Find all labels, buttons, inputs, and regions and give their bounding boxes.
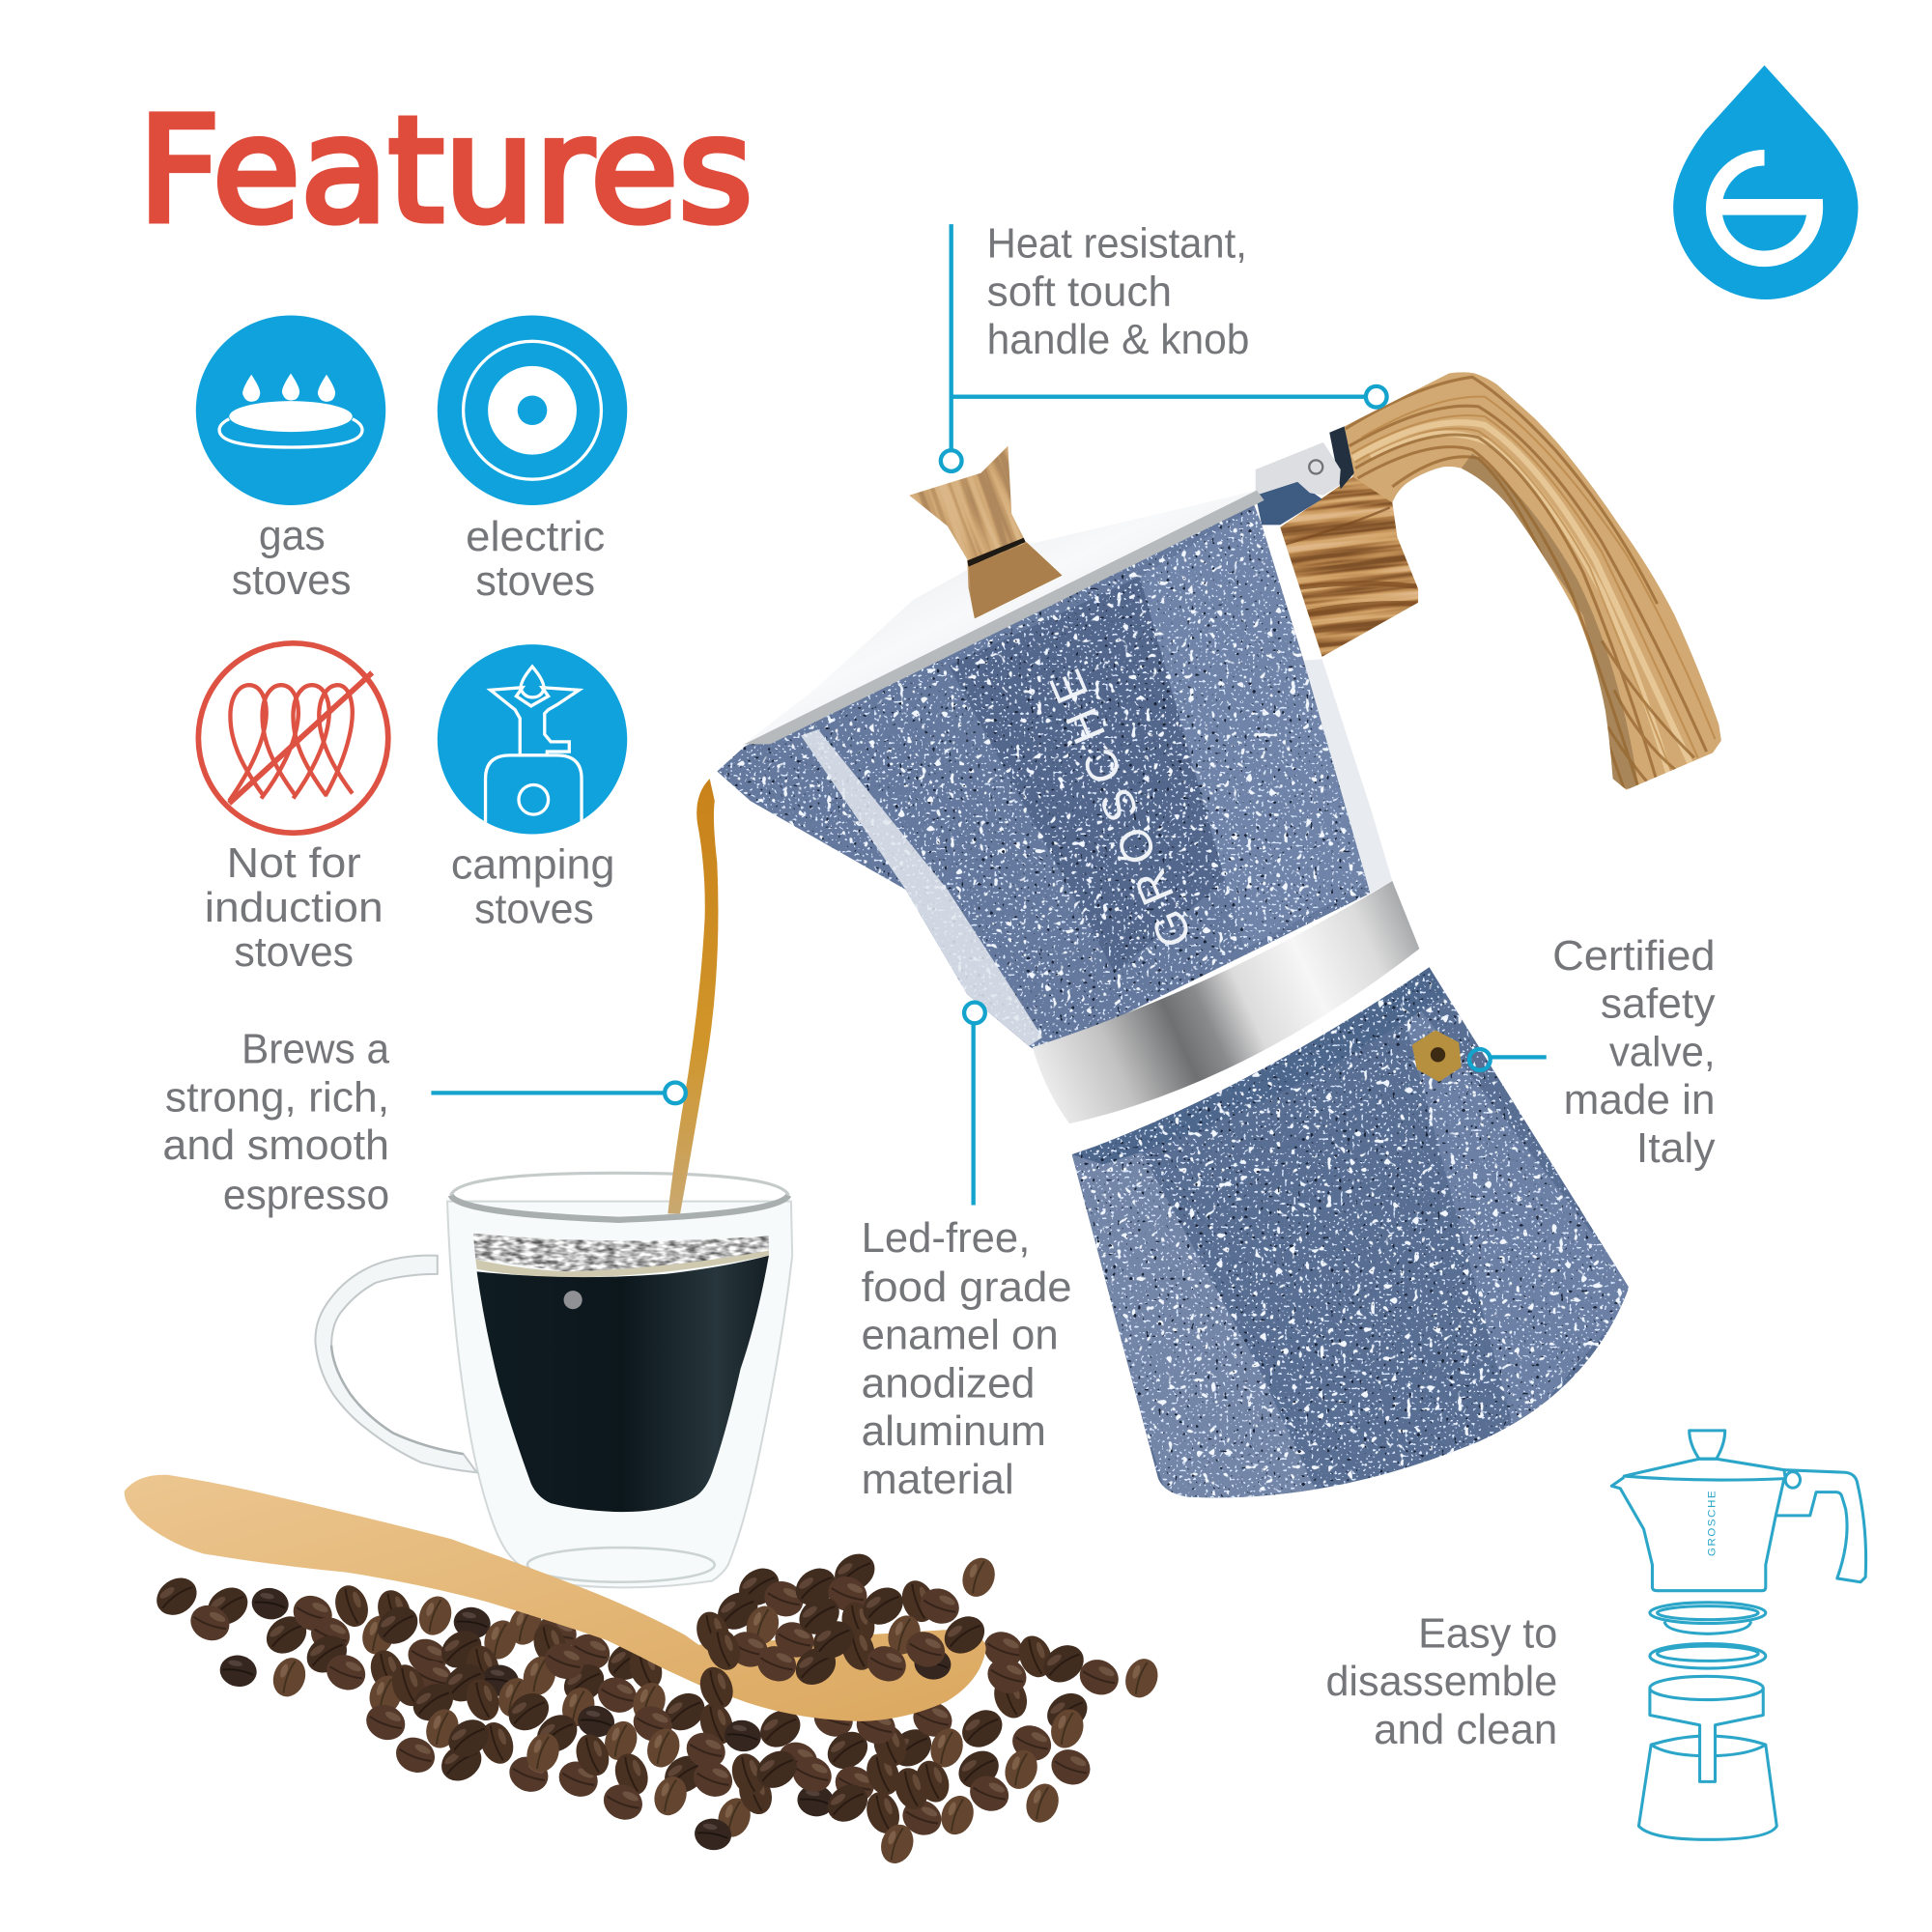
pot handle bbox=[1280, 372, 1721, 790]
label: not for induction stoves: stoves bbox=[234, 929, 354, 976]
moka pot bbox=[702, 357, 1737, 1516]
callout: safety valve bbox=[1469, 1049, 1547, 1070]
text: enamel material: food grade bbox=[862, 1264, 1072, 1311]
coffee stream bbox=[668, 779, 718, 1213]
text: espresso callout bbox=[162, 1027, 390, 1218]
callout: espresso stream bbox=[431, 1083, 686, 1103]
icon: electric stoves bbox=[438, 316, 627, 505]
text: easy to clean: and clean bbox=[1374, 1707, 1557, 1753]
text: certified safety valve: Certified bbox=[1552, 933, 1716, 980]
label: not for induction stoves bbox=[205, 840, 384, 976]
text: espresso callout: strong, rich, bbox=[165, 1075, 389, 1122]
pale body reflection bbox=[1303, 659, 1392, 894]
coffee beans heaped on the spoon bbox=[691, 1561, 992, 1713]
label: gas stoves: stoves bbox=[232, 557, 352, 604]
gasket bbox=[1650, 1644, 1766, 1668]
bottom chamber bbox=[1638, 1736, 1776, 1839]
lid rim bbox=[744, 491, 1264, 744]
text: heat resistant: handle & knob bbox=[987, 317, 1249, 363]
text: certified safety valve: made in bbox=[1564, 1077, 1716, 1123]
filter plate bbox=[1650, 1603, 1766, 1634]
text: easy to clean bbox=[1325, 1610, 1557, 1753]
icon: gas stoves bbox=[196, 316, 385, 505]
pot upper body bbox=[717, 505, 1370, 1049]
text: easy to clean: disassemble bbox=[1325, 1659, 1557, 1705]
coffee beans under the spoon bbox=[150, 1547, 1163, 1868]
label: electric stoves: stoves bbox=[475, 558, 595, 605]
label: not for induction stoves: induction bbox=[205, 885, 384, 931]
text: espresso callout: espresso bbox=[223, 1172, 389, 1218]
label: camping stoves: camping bbox=[451, 841, 614, 888]
text: espresso callout: Brews a bbox=[242, 1027, 390, 1073]
icon: camping stoves bbox=[438, 644, 627, 844]
text: heat resistant: Heat resistant, bbox=[987, 221, 1247, 268]
text: easy to clean: Easy to bbox=[1418, 1610, 1557, 1657]
label: camping stoves: stoves bbox=[474, 886, 594, 932]
callout: enamel body bbox=[964, 1003, 985, 1205]
pot lid bbox=[744, 487, 1269, 752]
brand name on pot: GROSCHE bbox=[1039, 663, 1203, 954]
glass mug bbox=[315, 1173, 792, 1587]
title: Features bbox=[138, 86, 753, 255]
label: camping stoves bbox=[451, 841, 614, 932]
icon: not for induction bbox=[198, 643, 388, 833]
label: gas stoves: gas bbox=[259, 513, 326, 559]
text: enamel material: material bbox=[862, 1457, 1014, 1503]
label: electric stoves: electric bbox=[466, 514, 605, 560]
label: electric stoves bbox=[466, 514, 605, 605]
icon: disassembled moka pot line drawing bbox=[1611, 1431, 1866, 1839]
label: not for induction stoves: Not for bbox=[227, 840, 361, 887]
text: enamel material: enamel on bbox=[862, 1313, 1059, 1359]
text: enamel material: Led-free, bbox=[862, 1215, 1030, 1262]
small brand name: GROSCHE bbox=[1707, 1491, 1719, 1556]
label: gas stoves bbox=[232, 513, 352, 604]
funnel filter bbox=[1650, 1676, 1763, 1781]
hinge bbox=[1256, 426, 1354, 525]
text: enamel material bbox=[862, 1215, 1072, 1503]
lid knob bbox=[910, 446, 1063, 618]
wooden spoon bbox=[125, 1475, 986, 1721]
text: heat resistant: soft touch bbox=[987, 269, 1172, 315]
icon: brand water drop logo bbox=[1673, 66, 1858, 299]
text: espresso callout: and smooth bbox=[162, 1122, 389, 1169]
pot lower body bbox=[1072, 967, 1629, 1497]
safety valve bbox=[1412, 1030, 1462, 1082]
callout: handle and knob bbox=[941, 224, 1387, 471]
text: enamel material: anodized bbox=[862, 1360, 1035, 1406]
text: certified safety valve: Italy bbox=[1636, 1125, 1716, 1172]
text: enamel material: aluminum bbox=[862, 1408, 1046, 1455]
silver ring bbox=[1033, 881, 1419, 1123]
text: certified safety valve: valve, bbox=[1609, 1029, 1716, 1075]
text: certified safety valve bbox=[1552, 933, 1716, 1172]
text: certified safety valve: safety bbox=[1601, 981, 1716, 1028]
text: heat resistant bbox=[987, 221, 1249, 363]
